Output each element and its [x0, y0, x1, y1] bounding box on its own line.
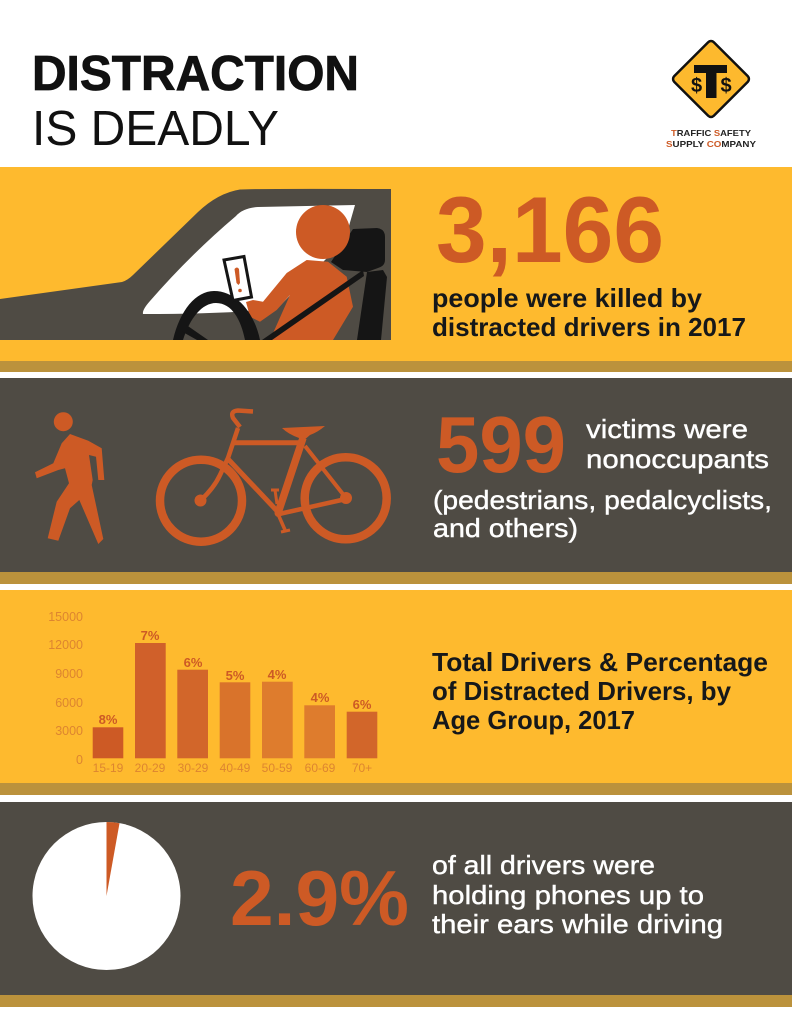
- percentage labels: 5%: [226, 668, 245, 683]
- percentage labels: 6%: [353, 697, 372, 712]
- icon: bicycle: [160, 410, 387, 542]
- big number: 3,166: [436, 177, 664, 282]
- stat description: nonoccupants: [586, 444, 769, 474]
- title: IS DEADLY: [32, 102, 279, 156]
- y axis labels: 12000: [48, 638, 83, 652]
- title: DISTRACTION: [32, 47, 359, 101]
- stat description: [433, 414, 772, 543]
- stat description: people were killed by: [432, 283, 703, 313]
- pie chart: [32, 822, 180, 970]
- icon: distracted driver in car: [0, 189, 391, 340]
- torso and arm: [246, 260, 353, 340]
- chart caption: [432, 647, 768, 735]
- x axis labels: 50-59: [262, 761, 293, 775]
- stat description: holding phones up to: [432, 880, 704, 910]
- y axis labels: 6000: [55, 696, 83, 710]
- icon: diamond road sign: $: [720, 75, 732, 97]
- y axis labels: 0: [76, 753, 83, 767]
- x axis labels: 30-29: [178, 761, 209, 775]
- big number: 599: [436, 400, 566, 489]
- x axis labels: 20-29: [135, 761, 166, 775]
- logo wordmark: TRAFFIC SAFETY: [671, 128, 751, 138]
- icon: diamond road sign: [671, 39, 751, 119]
- x axis labels: 40-49: [220, 761, 251, 775]
- stat description: (pedestrians, pedalcyclists,: [433, 485, 772, 515]
- logo wordmark: SUPPLY COMPANY: [666, 139, 756, 149]
- panel: fatalities: [0, 167, 792, 372]
- bars: [93, 643, 377, 758]
- icon: pedestrian: [35, 412, 104, 544]
- seat belt: [262, 270, 364, 340]
- percentage labels: 7%: [141, 628, 160, 643]
- head: [296, 205, 350, 259]
- steering wheel: [173, 291, 260, 340]
- x axis labels: 15-19: [93, 761, 124, 775]
- x axis labels: 70+: [352, 761, 372, 775]
- stat description: of all drivers were: [432, 850, 655, 880]
- percentage labels: 8%: [99, 712, 118, 727]
- y axis labels: [48, 610, 83, 767]
- stat description: [432, 850, 723, 939]
- stat description: and others): [433, 513, 578, 543]
- y axis labels: 15000: [48, 610, 83, 624]
- y axis labels: 3000: [55, 724, 83, 738]
- big number: 2.9%: [230, 854, 409, 942]
- icon: diamond road sign: $: [691, 75, 702, 97]
- y axis labels: 9000: [55, 667, 83, 681]
- title: [32, 47, 359, 156]
- x axis labels: 60-69: [305, 761, 336, 775]
- bar chart: [48, 610, 377, 775]
- stat description: distracted drivers in 2017: [432, 312, 746, 342]
- seat: [331, 228, 385, 272]
- panel: age groups: [0, 590, 792, 795]
- chart caption: of Distracted Drivers, by: [432, 676, 732, 706]
- stat description: victims were: [586, 414, 748, 444]
- percentage labels: 4%: [311, 690, 330, 705]
- x axis labels: [93, 761, 372, 775]
- phone: [224, 256, 252, 300]
- logo wordmark: [666, 128, 756, 149]
- stat description: [432, 283, 746, 342]
- chart caption: Total Drivers & Percentage: [432, 647, 768, 677]
- logo: Traffic Safety Supply Company: [666, 39, 756, 149]
- panel: nonoccupants: [0, 378, 792, 584]
- chart caption: Age Group, 2017: [432, 705, 635, 735]
- stat description: their ears while driving: [432, 909, 723, 939]
- percentage labels: 6%: [184, 655, 203, 670]
- percentage labels: 4%: [268, 667, 287, 682]
- panel: phones: [0, 802, 792, 1007]
- percentage labels: [99, 628, 372, 727]
